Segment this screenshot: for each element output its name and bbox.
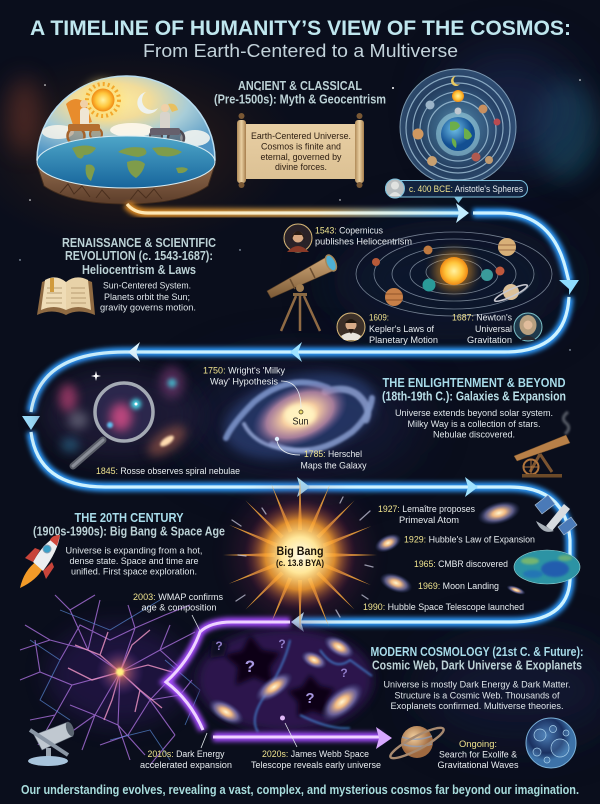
label: aristotle: c. 400 BCE: Aristotle's Spheres	[409, 184, 523, 195]
text: modern summary: Structure is a Cosmic Web. Thousands of	[394, 690, 560, 702]
heading: renaissance: RENAISSANCE & SCIENTIFIC	[62, 236, 216, 250]
arrow path: enlightenment to twentieth century	[31, 432, 570, 632]
text: twentieth century summary: Universe is expanding from a hot,	[66, 546, 202, 556]
icon: antique telescope	[514, 412, 570, 478]
events: twentieth century timeline: 1927: Lemaître proposes	[378, 504, 475, 515]
dark universe region: ?	[245, 657, 255, 676]
label: james webb: Telescope reveals early universe	[251, 760, 381, 771]
heading: ancient and classical	[214, 79, 386, 106]
label: kepler: Kepler's Laws of	[369, 324, 434, 335]
label: herschel	[275, 437, 367, 472]
label: copernicus: publishes Heliocentrism	[315, 236, 412, 248]
heading: renaissance: REVOLUTION (c. 1543-1687):	[65, 249, 213, 263]
heading: ancient and classical: (Pre-1500s): Myth & Geocentrism	[214, 92, 386, 106]
events: twentieth century timeline: 1929: Hubble's Law of Expansion	[404, 534, 535, 546]
heading: ancient and classical: ANCIENT & CLASSICAL	[238, 79, 362, 93]
text: twentieth century summary	[66, 546, 202, 578]
label: wright	[203, 366, 301, 408]
heading: enlightenment: (18th-19th C.): Galaxies & Expansion	[382, 390, 566, 404]
milky way galaxy: Sun	[292, 416, 308, 428]
text: renaissance summary: gravity governs motion.	[100, 302, 196, 314]
label: dark energy: 2010s: Dark Energy	[148, 749, 225, 760]
text: enlightenment summary: Milky Way is a collection of stars.	[408, 419, 540, 430]
title: From Earth-Centered to a Multiverse	[143, 40, 458, 61]
label: herschel: Maps the Galaxy	[300, 460, 367, 472]
heading: twentieth century: (1900s-1990s): Big Bang & Space Age	[33, 524, 225, 538]
icon: rocket	[20, 535, 60, 588]
icon: flat earth under dome	[37, 76, 215, 204]
label: wright: 1750: Wright's 'Milky	[203, 366, 285, 376]
big bang burst	[223, 478, 377, 632]
icon: brass telescope	[267, 253, 339, 331]
label: newton: Universal	[475, 324, 512, 335]
cosmic web	[20, 595, 200, 765]
dark universe region: ?	[278, 637, 286, 651]
arrow path: renaissance to enlightenment	[22, 213, 579, 430]
text: renaissance summary: Planets orbit the Sun;	[104, 292, 190, 303]
events: twentieth century timeline: Primeval Atom	[399, 515, 459, 526]
label: newton: 1687: Newton's	[452, 312, 512, 324]
big bang burst: (c. 13.8 BYA)	[276, 558, 324, 568]
label: wmap: age & composition	[142, 602, 216, 614]
dark universe region: ?	[340, 666, 348, 680]
events: twentieth century timeline: 1990: Hubble Space Telescope launched	[363, 602, 524, 613]
label: copernicus: 1543: Copernicus	[315, 226, 383, 236]
label: wmap: 2003: WMAP confirms	[133, 592, 223, 603]
icon: multiverse bubbles	[526, 718, 576, 768]
text: twentieth century summary: unified. First space exploration.	[71, 566, 197, 578]
label: newton	[452, 312, 542, 346]
text: renaissance summary	[100, 280, 196, 314]
label: kepler	[337, 312, 438, 346]
events: twentieth century timeline: 1965: CMBR discovered	[414, 559, 508, 570]
label: james webb: 2020s: James Webb Space	[262, 749, 369, 760]
text: renaissance summary: Sun-Centered System.	[103, 280, 191, 292]
icon: hubble telescope	[28, 721, 76, 766]
label: james webb	[251, 716, 381, 771]
text: modern summary	[384, 680, 570, 712]
events: twentieth century timeline	[363, 497, 535, 613]
heading: renaissance: Heliocentrism & Laws	[82, 263, 196, 277]
text: enlightenment summary: Universe extends beyond solar system.	[395, 408, 553, 419]
text: enlightenment summary	[395, 408, 553, 440]
label: ongoing: Search for Exolife &	[439, 750, 518, 760]
label: wmap	[133, 592, 223, 631]
scroll callout: divine forces.	[275, 162, 327, 173]
label: newton: Gravitation	[467, 335, 512, 346]
events: twentieth century timeline: 1969: Moon Landing	[418, 581, 499, 592]
label: ongoing: Gravitational Waves	[438, 760, 519, 771]
label: aristotle	[386, 179, 528, 203]
diagram: solar system	[356, 232, 552, 316]
arrow path: modern cosmology	[166, 622, 392, 749]
icon: cmb map	[514, 550, 580, 584]
label: wright: Way' Hypothesis	[210, 376, 278, 388]
label: ongoing	[438, 739, 519, 771]
arrow path: ancient to renaissance	[127, 203, 469, 223]
icon: open book	[37, 277, 95, 315]
label: herschel: 1785: Herschel	[304, 449, 362, 460]
heading: enlightenment: THE ENLIGHTENMENT & BEYOND	[382, 376, 566, 390]
text: twentieth century summary: dense state. Space and time are	[70, 556, 198, 567]
scroll callout	[237, 113, 364, 188]
title: A TIMELINE OF HUMANITY’S VIEW OF THE COSMOS:	[30, 16, 571, 40]
icon: satellite	[535, 495, 577, 535]
label: copernicus	[284, 224, 412, 252]
label: rosse: 1845: Rosse observes spiral nebulae	[96, 466, 240, 477]
text: modern summary: Universe is mostly Dark Energy & Dark Matter.	[384, 680, 570, 690]
text: modern summary: Exoplanets confirmed. Multiverse theories.	[390, 701, 564, 712]
scroll callout: Cosmos is finite and	[261, 142, 341, 152]
heading: twentieth century	[33, 511, 225, 538]
label: ongoing: Ongoing:	[459, 739, 497, 750]
label: kepler: 1609:	[369, 312, 389, 324]
nebula with magnifier	[42, 366, 198, 466]
label: dark energy: accelerated expansion	[140, 760, 232, 771]
dark universe region: ?	[305, 690, 315, 707]
icon: ringed exoplanet	[387, 723, 447, 763]
milky way galaxy	[215, 358, 385, 474]
heading: renaissance	[62, 236, 216, 277]
dark universe region: ?	[215, 639, 223, 653]
heading: modern cosmology	[370, 645, 584, 672]
heading: twentieth century: THE 20TH CENTURY	[74, 511, 184, 525]
scroll callout: Earth-Centered Universe.	[251, 131, 351, 142]
title	[30, 16, 571, 61]
big bang burst: Big Bang	[276, 544, 324, 558]
label: dark energy	[140, 733, 232, 771]
heading: enlightenment	[382, 376, 566, 404]
scroll callout: eternal, governed by	[260, 152, 342, 163]
dark universe region	[197, 628, 373, 732]
label: kepler: Planetary Motion	[369, 335, 438, 346]
text: enlightenment summary: Nebulae discovered.	[433, 430, 515, 440]
icon: aristotle's spheres	[400, 69, 516, 185]
